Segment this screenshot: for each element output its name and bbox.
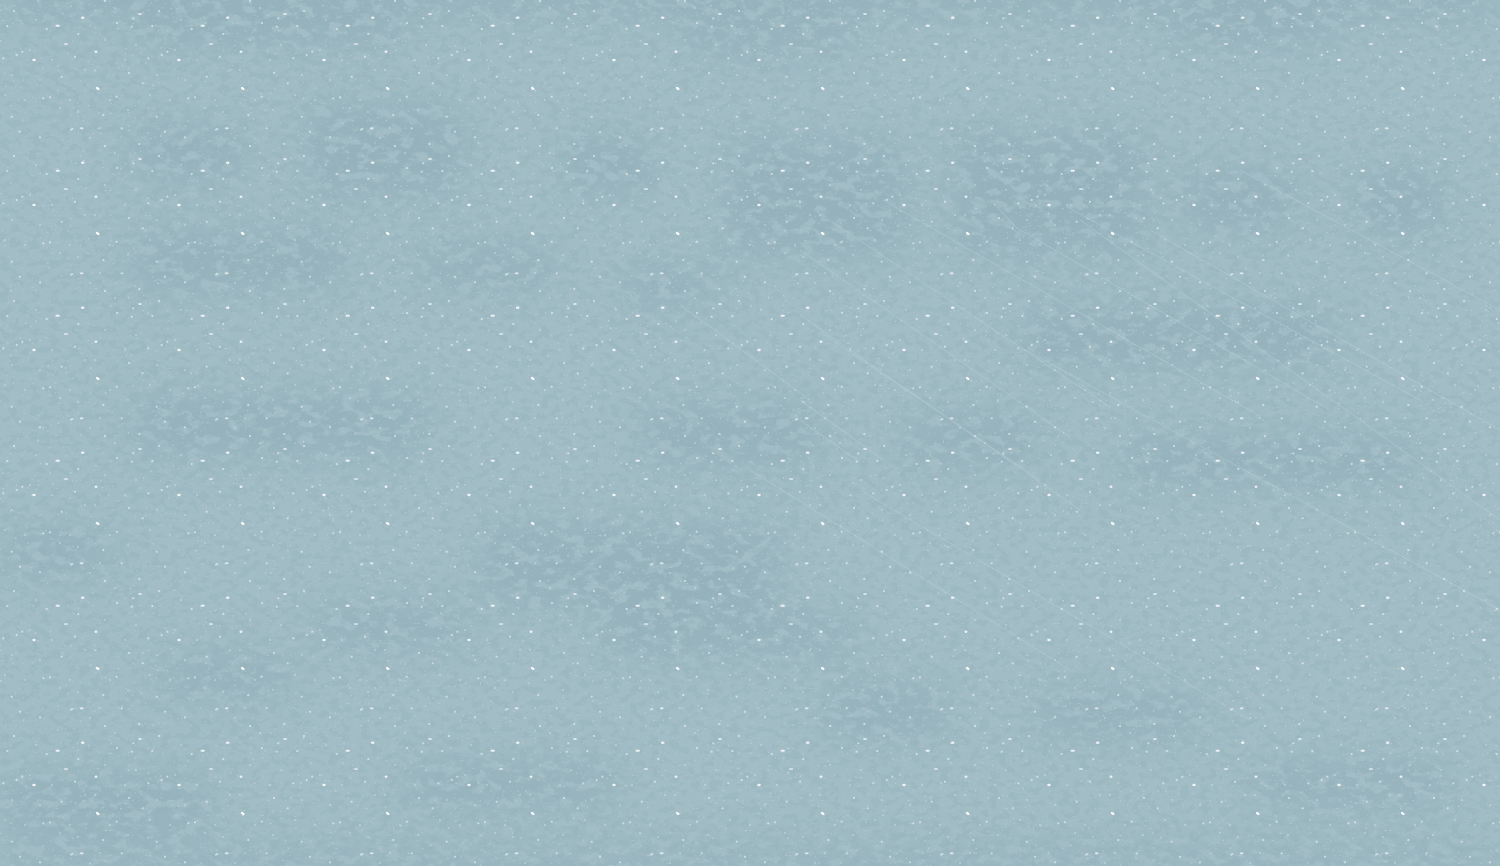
diagonal scratches xyxy=(680,170,1500,720)
